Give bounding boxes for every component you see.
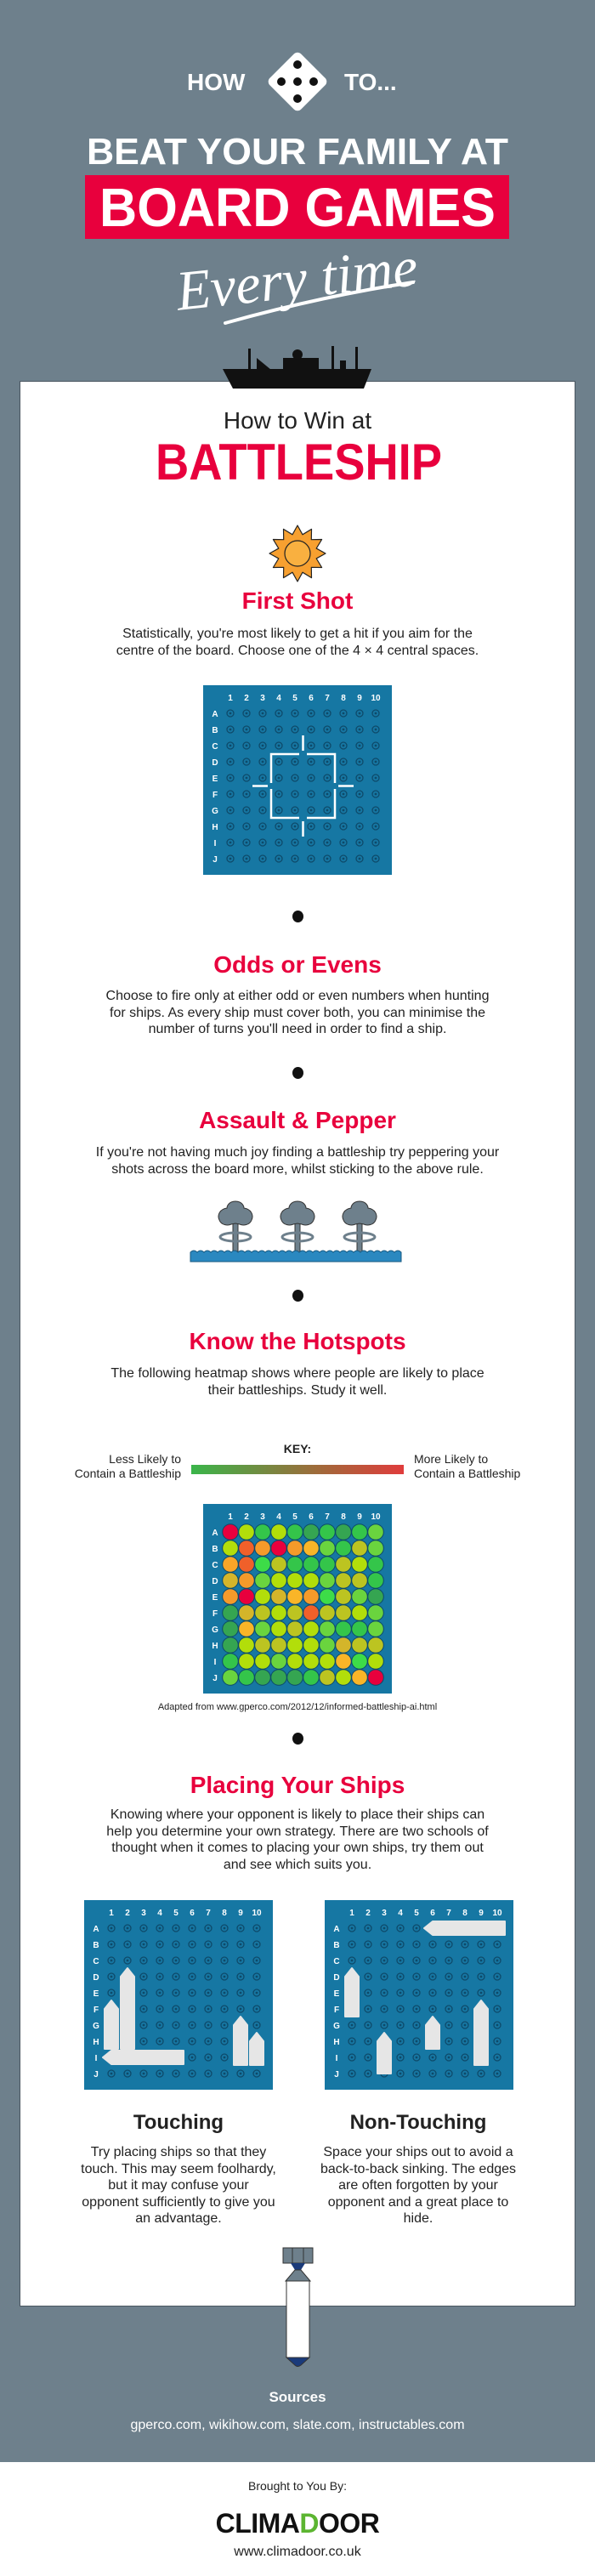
chart: heatmap: 4: [276, 1512, 281, 1522]
text: placing: and see which suits you.: [224, 1858, 371, 1872]
chart: heatmap: 7: [325, 1512, 330, 1522]
column: touching: an advantage.: [135, 2211, 222, 2226]
column: touching: Touching: [133, 2111, 224, 2134]
chart: heatmap: 10: [371, 1512, 381, 1522]
divider dot: [292, 1733, 303, 1745]
chart: board with crosshair: 6: [309, 694, 314, 703]
sources: gperco.com, wikihow.com, slate.com, instructables.com: [130, 2418, 465, 2432]
chart: touching board: D: [93, 1973, 99, 1983]
chart: touching board: B: [93, 1941, 99, 1950]
icon: explosions over water: [190, 1200, 401, 1262]
chart: heatmap: 6: [309, 1512, 314, 1522]
column: non-touching: [320, 2111, 516, 2226]
legend: key: KEY:: [284, 1442, 311, 1455]
text: odds or evens: Choose to fire only at either odd or even numbers when hunting: [106, 989, 489, 1003]
chart: board with crosshair: 2: [244, 694, 249, 703]
sources: [130, 2389, 465, 2432]
chart: non-touching board: 6: [430, 1909, 435, 1918]
chart: non-touching board: H: [333, 2038, 340, 2047]
chart: non-touching board: B: [333, 1941, 340, 1950]
column: non-touching: Space your ships out to avoid a: [323, 2145, 513, 2159]
chart: touching board: 9: [238, 1909, 243, 1918]
sources: Sources: [269, 2389, 326, 2405]
title: BEAT YOUR FAMILY AT: [87, 131, 508, 173]
chart: board with crosshair: [203, 685, 392, 875]
text: assault & pepper: [96, 1145, 499, 1177]
text: odds or evens: number of turns you'll need in order to find a ship.: [149, 1022, 446, 1036]
column: touching: opponent sufficiently to give you: [82, 2195, 275, 2210]
text: hotspots: The following heatmap shows where people are likely to place: [110, 1366, 484, 1381]
column: touching: touch. This may seem foolhardy,: [81, 2162, 276, 2176]
chart: non-touching board: 9: [479, 1909, 484, 1918]
divider dot: [292, 1290, 303, 1302]
chart: heatmap: 9: [357, 1512, 362, 1522]
chart: non-touching board: G: [333, 2022, 340, 2031]
heading: how to win at battleship: How to Win at: [224, 407, 371, 434]
icon: battleship silhouette: [223, 346, 371, 389]
text: placing: Knowing where your opponent is likely to place their ships can: [110, 1807, 484, 1822]
chart: non-touching board: 5: [414, 1909, 419, 1918]
chart: heatmap: 2: [244, 1512, 249, 1522]
chart: heatmap: F: [212, 1609, 218, 1619]
footer: brought to you by: Brought to You By:: [248, 2479, 347, 2493]
chart: board with crosshair: 7: [325, 694, 330, 703]
heading: placing your ships: Placing Your Ships: [190, 1772, 405, 1798]
chart: non-touching board: D: [333, 1973, 340, 1983]
column: non-touching: opponent and a great place to: [328, 2195, 508, 2210]
chart: touching board: C: [93, 1957, 99, 1966]
chart: board with crosshair: 5: [292, 694, 298, 703]
legend: key: More Likely to: [414, 1452, 488, 1466]
legend: key: Less Likely to: [109, 1452, 181, 1466]
footer: url: www.climadoor.co.uk: [234, 2545, 361, 2559]
icon: bomb: [282, 2248, 313, 2367]
chart: non-touching board: E: [334, 1989, 340, 1999]
chart: board with crosshair: 4: [276, 694, 281, 703]
chart: non-touching board: 10: [492, 1909, 502, 1918]
chart: non-touching board: I: [336, 2054, 338, 2063]
chart: board with crosshair: G: [212, 807, 218, 816]
text: first shot: centre of the board. Choose one of the 4 × 4 central spaces.: [116, 644, 479, 658]
chart: touching board: 8: [222, 1909, 227, 1918]
chart: heatmap: [203, 1504, 392, 1694]
chart: touching board: F: [94, 2006, 99, 2015]
heading: how to win at battleship: [156, 407, 442, 481]
text: odds or evens: [106, 989, 489, 1036]
chart: board with crosshair: 1: [228, 694, 233, 703]
divider dot: [292, 1067, 303, 1079]
column: touching: but it may confuse your: [108, 2178, 249, 2193]
chart: touching board: A: [93, 1925, 99, 1934]
caption: heatmap source: Adapted from www.gperco.com/2012/12/informed-battleship-ai.html: [158, 1702, 437, 1712]
chart: touching board: H: [93, 2038, 99, 2047]
chart: non-touching board: C: [333, 1957, 340, 1966]
chart: non-touching board: F: [334, 2006, 339, 2015]
chart: heatmap: B: [212, 1545, 218, 1554]
text: placing: help you determine your own strategy. There are two schools of: [106, 1824, 489, 1839]
chart: heatmap: 5: [292, 1512, 298, 1522]
icon: dice: [269, 53, 326, 111]
title: BOARD GAMES: [99, 177, 496, 238]
chart: board with crosshair: J: [212, 855, 218, 865]
legend: key: Contain a Battleship: [414, 1467, 520, 1480]
chart: heatmap: 8: [341, 1512, 346, 1522]
chart: non-touching board: 8: [462, 1909, 468, 1918]
text: placing: thought when it comes to placing your own ships, try them out: [111, 1841, 484, 1855]
heading: know the hotspots: Know the Hotspots: [189, 1328, 406, 1354]
chart: board with crosshair: D: [212, 758, 218, 768]
chart: touching board: 4: [157, 1909, 162, 1918]
chart: heatmap: 1: [228, 1512, 233, 1522]
divider dot: [292, 911, 303, 922]
chart: non-touching board: 2: [366, 1909, 371, 1918]
chart: touching board: J: [94, 2070, 99, 2080]
chart: heatmap: 3: [260, 1512, 265, 1522]
chart: heatmap: D: [212, 1577, 218, 1586]
chart: board with crosshair: F: [212, 791, 218, 800]
header: how to dice: [187, 53, 397, 111]
chart: non-touching board: 4: [398, 1909, 403, 1918]
chart: heatmap: C: [212, 1561, 218, 1570]
chart: touching board: G: [93, 2022, 99, 2031]
chart: non-touching board: A: [333, 1925, 340, 1934]
text: assault & pepper: shots across the board more, whilst sticking to the above rule.: [111, 1162, 484, 1177]
text: HOW: HOW: [187, 69, 245, 95]
chart: board with crosshair: 10: [371, 694, 381, 703]
chart: non-touching board: 1: [349, 1909, 354, 1918]
chart: heatmap: E: [212, 1593, 218, 1603]
text: TO...: TO...: [344, 69, 397, 95]
panel: main: [20, 381, 575, 2306]
chart: board with crosshair: H: [212, 823, 218, 832]
icon: explosion: [269, 525, 326, 582]
chart: board with crosshair: 3: [260, 694, 265, 703]
chart: board with crosshair: 9: [357, 694, 362, 703]
column: non-touching: hide.: [404, 2211, 433, 2226]
text: odds or evens: for ships. As every ship must cover both, you can minimise the: [110, 1006, 485, 1020]
text: assault & pepper: If you're not having much joy finding a battleship try peppering your: [96, 1145, 499, 1160]
column: non-touching: Non-Touching: [350, 2111, 486, 2134]
legend: key: Contain a Battleship: [75, 1467, 181, 1480]
chart: heatmap: I: [214, 1658, 217, 1667]
chart: non-touching board: 3: [382, 1909, 387, 1918]
chart: heatmap: H: [212, 1642, 218, 1651]
heading: odds or evens: Odds or Evens: [213, 951, 382, 978]
chart: heatmap: A: [212, 1529, 218, 1538]
chart: board with crosshair: C: [212, 742, 218, 752]
text: hotspots: [110, 1366, 484, 1398]
text: first shot: [116, 627, 479, 658]
title: Every time: [173, 235, 421, 323]
text: first shot: Statistically, you're most likely to get a hit if you aim for the: [122, 627, 473, 641]
chart: heatmap: J: [212, 1674, 218, 1683]
chart: touching board: E: [94, 1989, 99, 1999]
chart: touching board: 1: [109, 1909, 114, 1918]
chart: touching board: 6: [190, 1909, 195, 1918]
chart: non-touching board: J: [334, 2070, 339, 2080]
column: touching: Try placing ships so that they: [91, 2145, 266, 2159]
column: touching: [81, 2111, 276, 2226]
legend: key: [75, 1442, 520, 1480]
chart: board with crosshair: I: [214, 839, 217, 848]
chart: touching board: 2: [125, 1909, 130, 1918]
heading: assault & pepper: Assault & Pepper: [199, 1107, 396, 1133]
column: non-touching: are often forgotten by your: [338, 2178, 498, 2193]
heading: first shot: First Shot: [242, 587, 353, 614]
title: [85, 131, 509, 325]
chart: board with crosshair: B: [212, 726, 218, 735]
chart: touching board: I: [95, 2054, 98, 2063]
chart: touching board: 10: [252, 1909, 262, 1918]
text: hotspots: their battleships. Study it well.: [208, 1383, 387, 1398]
chart: heatmap: G: [212, 1626, 218, 1635]
chart: board with crosshair: 8: [341, 694, 346, 703]
chart: non-touching board: 7: [446, 1909, 451, 1918]
chart: board with crosshair: A: [212, 710, 218, 719]
chart: touching board: [84, 1900, 273, 2090]
column: non-touching: back-to-back sinking. The edges: [320, 2162, 516, 2176]
chart: board with crosshair: E: [212, 775, 218, 784]
logo: climadoor: CLIMADOOR: [216, 2508, 379, 2539]
text: placing: [106, 1807, 489, 1872]
chart: touching board: 7: [206, 1909, 211, 1918]
chart: non-touching board: [325, 1900, 513, 2090]
chart: touching board: 5: [173, 1909, 178, 1918]
chart: touching board: 3: [141, 1909, 146, 1918]
